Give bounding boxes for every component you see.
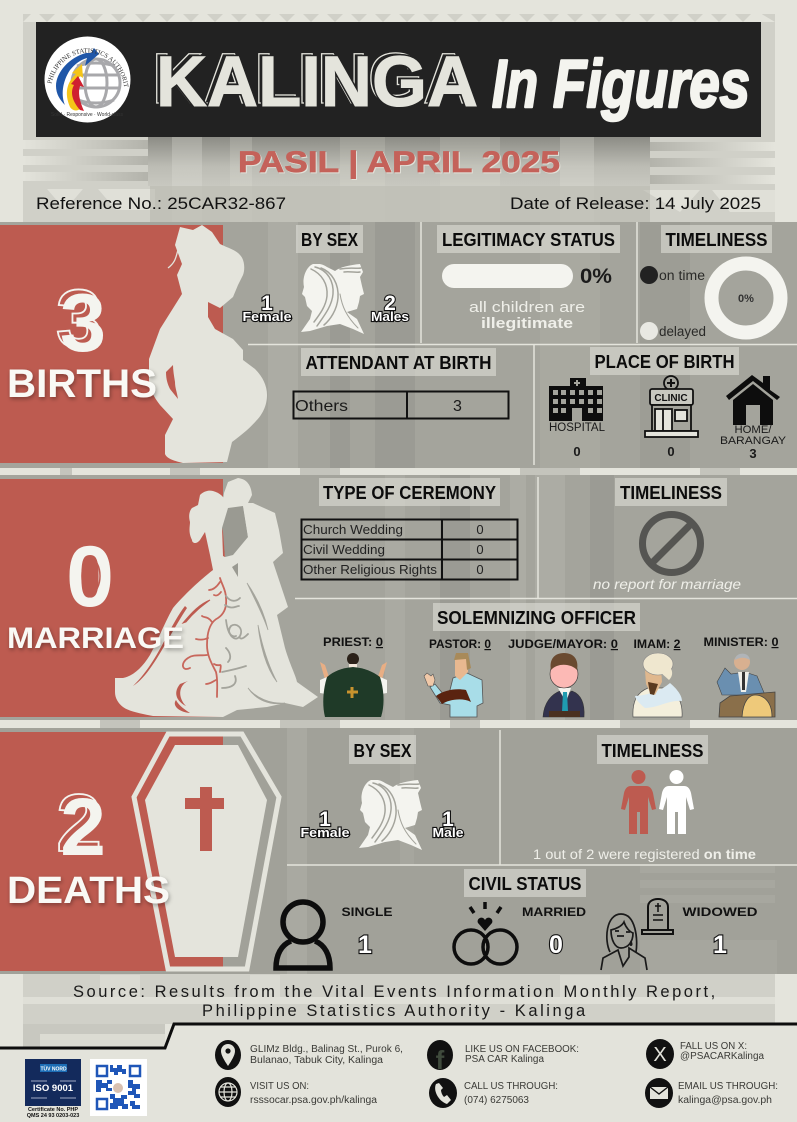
timeliness legend: delayed	[659, 324, 706, 339]
contact: email: EMAIL US THROUGH:	[678, 1081, 778, 1092]
contact: facebook	[427, 1040, 579, 1075]
civil status: widowed	[601, 899, 758, 970]
civil status: single: 1	[358, 931, 372, 959]
contact: phone: CALL US THROUGH:	[464, 1081, 558, 1092]
source note: Philippine Statistics Authority - Kalinga	[202, 1002, 586, 1020]
panel: deaths	[0, 732, 758, 971]
table: type of ceremony: Other Religious Rights	[303, 562, 438, 577]
icon: house	[726, 375, 780, 425]
table: type of ceremony: Church Wedding	[303, 522, 403, 537]
footer	[0, 1024, 797, 1122]
heading: civil status: CIVIL STATUS	[468, 874, 582, 894]
civil status: single	[276, 902, 392, 968]
source note	[73, 983, 716, 1020]
label: home/barangay: HOME/	[734, 424, 772, 436]
heading: civil status	[464, 869, 586, 897]
QR code	[90, 1059, 147, 1116]
contact: address: Bulanao, Tabuk City, Kalinga	[250, 1055, 383, 1066]
heading: by sex	[296, 225, 363, 253]
female count: Female	[300, 825, 350, 840]
contact: address	[215, 1040, 403, 1070]
female count	[242, 292, 292, 324]
title: KALINGA: KALINGA	[156, 43, 478, 122]
heading: timeliness	[661, 225, 772, 253]
PSA logo	[44, 36, 130, 122]
title: In Figures: Figures	[553, 46, 750, 122]
icon: no-report sign	[642, 514, 700, 572]
civil status: married: MARRIED	[522, 905, 586, 919]
civil status: married	[454, 902, 586, 964]
female count: Female	[242, 309, 292, 324]
heading: timeliness: TIMELINESS	[602, 741, 704, 761]
ISO certificate badge: TÜV NORD	[40, 1066, 67, 1072]
heading: attendant at birth	[301, 348, 496, 376]
contact: phone	[429, 1078, 558, 1108]
timeliness legend	[640, 266, 706, 340]
contact: address: GLIMz Bldg., Balinag St., Purok 6,	[250, 1044, 403, 1055]
label: clinic: 0	[667, 444, 675, 459]
contact: X: X	[653, 1044, 667, 1066]
table: attendant: Others	[295, 398, 348, 415]
donut chart: 0%	[738, 293, 754, 305]
heading: attendant at birth: ATTENDANT AT BIRTH	[306, 353, 492, 373]
icon: clinic: CLINIC	[654, 393, 688, 404]
heading: by sex: BY SEX	[301, 230, 358, 250]
contact: email: kalinga@psa.gov.ph	[678, 1095, 772, 1106]
table: type of ceremony: 0	[476, 542, 484, 557]
civil status: widowed: 1	[713, 931, 727, 959]
female count: 1	[261, 292, 273, 315]
table: attendant	[294, 391, 508, 419]
legitimacy note: illegitimate	[481, 315, 573, 332]
officer: minister: MINISTER: 0	[704, 635, 779, 649]
civil status: widowed: WIDOWED	[682, 905, 758, 919]
heading: legitimacy status: LEGITIMACY STATUS	[442, 230, 615, 250]
header banner	[36, 22, 761, 137]
timeliness note: 1 out of 2 were registered on time	[533, 847, 757, 862]
heading: solemnizing officer	[433, 603, 640, 631]
title: KALINGA: KALINGA	[152, 40, 474, 119]
heading: place of birth	[590, 347, 739, 375]
officer: minister	[704, 635, 779, 717]
reference number: Reference No.: 25CAR32-867	[36, 195, 286, 213]
ISO certificate badge: ISO 9001	[33, 1083, 74, 1094]
icon: coffin	[134, 734, 279, 969]
heading: legitimacy status	[437, 225, 620, 253]
ISO certificate badge: QMS 24 93 0203-023	[27, 1113, 79, 1119]
heading: timeliness	[615, 478, 727, 506]
officer: imam	[633, 637, 682, 717]
title: In Figures: In	[492, 46, 538, 122]
icon: female and male profiles	[359, 780, 422, 850]
contact: phone: (074) 6275063	[464, 1095, 529, 1106]
contact: website: rsssocar.psa.gov.ph/kalinga	[250, 1095, 377, 1106]
panel: births	[0, 225, 787, 463]
release date: Date of Release: 14 July 2025	[510, 195, 761, 213]
contact: website	[215, 1077, 377, 1107]
male count: 1	[442, 808, 454, 831]
label: home/barangay: BARANGAY	[720, 435, 787, 447]
subtitle: PASIL | APRIL 2025	[238, 146, 560, 179]
title: In Figures	[492, 46, 750, 122]
officer: priest: PRIEST: 0	[323, 635, 383, 649]
contact: X: @PSACARKalinga	[680, 1051, 764, 1062]
heading: type of ceremony: TYPE OF CEREMONY	[323, 483, 496, 503]
heading: by sex	[349, 735, 416, 764]
contact: facebook: f	[436, 1045, 445, 1075]
legitimacy bar: 0%	[580, 265, 612, 288]
ISO certificate badge: Certificate No. PHP	[28, 1107, 78, 1113]
table: type of ceremony: 0	[476, 562, 484, 577]
table: type of ceremony: 0	[476, 522, 484, 537]
label: home/barangay: 3	[749, 446, 757, 461]
donut chart	[712, 264, 780, 332]
officer: imam: IMAM: 2	[634, 637, 681, 651]
legitimacy bar	[442, 264, 612, 288]
male count	[432, 808, 464, 840]
label: MARRIAGE: MARRIAGE	[7, 622, 184, 655]
contact: email	[645, 1078, 778, 1108]
number: 2 deaths: 2	[60, 782, 106, 873]
legitimacy note	[469, 299, 585, 332]
no report note: no report for marriage	[593, 577, 741, 592]
heading: timeliness: TIMELINESS	[620, 483, 722, 503]
icon: hospital	[549, 378, 606, 421]
heading: timeliness	[597, 735, 708, 764]
male count: Males	[371, 309, 409, 324]
officer: priest	[320, 635, 387, 717]
ISO certificate badge	[25, 1059, 81, 1119]
title: KALINGA: KALINGA	[156, 43, 478, 122]
heading: by sex: BY SEX	[354, 741, 412, 761]
heading: type of ceremony	[319, 478, 500, 506]
grey section bands	[0, 222, 797, 974]
legitimacy note: all children are	[469, 299, 585, 316]
contact: facebook: LIKE US ON FACEBOOK:	[465, 1044, 579, 1055]
male count: Male	[432, 825, 464, 840]
label: BIRTHS: BIRTHS	[7, 362, 157, 406]
contact: website: VISIT US ON:	[250, 1081, 309, 1092]
table: attendant: 3	[453, 398, 462, 415]
label: hospital: HOSPITAL	[549, 422, 606, 434]
heading: place of birth: PLACE OF BIRTH	[594, 352, 734, 372]
label: DEATHS: DEATHS	[7, 870, 170, 912]
female count	[300, 808, 350, 840]
table: type of ceremony: Civil Wedding	[303, 542, 385, 557]
PSA logo: Solid · Responsive · World-class	[51, 112, 124, 118]
civil status: single: SINGLE	[342, 905, 392, 919]
officer: judge/mayor: JUDGE/MAYOR: 0	[508, 637, 618, 651]
contact: X	[646, 1039, 764, 1069]
male count: 2	[384, 292, 396, 315]
number: 3 births: 3	[60, 276, 106, 369]
icon: bride and groom silhouette	[115, 478, 318, 717]
icon: pregnant woman silhouette	[149, 225, 267, 463]
label: hospital	[549, 422, 606, 459]
number: 2 deaths: 2	[56, 778, 102, 869]
contact: X: FALL US ON X:	[680, 1041, 747, 1052]
civil status: married: 0	[549, 931, 563, 959]
contact: facebook: PSA CAR Kalinga	[465, 1054, 544, 1065]
table: type of ceremony	[301, 519, 518, 580]
label: home/barangay	[720, 424, 787, 461]
officer: judge/mayor	[508, 637, 618, 717]
icon: two people	[621, 770, 694, 834]
timeliness legend: on time	[659, 268, 705, 283]
panel: marriage	[0, 478, 779, 717]
male count	[371, 292, 409, 324]
heading: solemnizing officer: SOLEMNIZING OFFICER	[437, 608, 636, 628]
label: hospital: 0	[573, 444, 581, 459]
number: 0 marriage: 0	[66, 529, 114, 625]
officer: pastor	[424, 637, 491, 717]
heading: timeliness: TIMELINESS	[666, 230, 768, 250]
icon: female and male profiles	[301, 264, 364, 334]
officer: pastor: PASTOR: 0	[429, 637, 491, 651]
number: 3 births: 3	[56, 272, 102, 365]
female count: 1	[319, 808, 331, 831]
icon: clinic	[645, 376, 698, 437]
source note: Source: Results from the Vital Events Information Monthly Report,	[73, 983, 716, 1001]
